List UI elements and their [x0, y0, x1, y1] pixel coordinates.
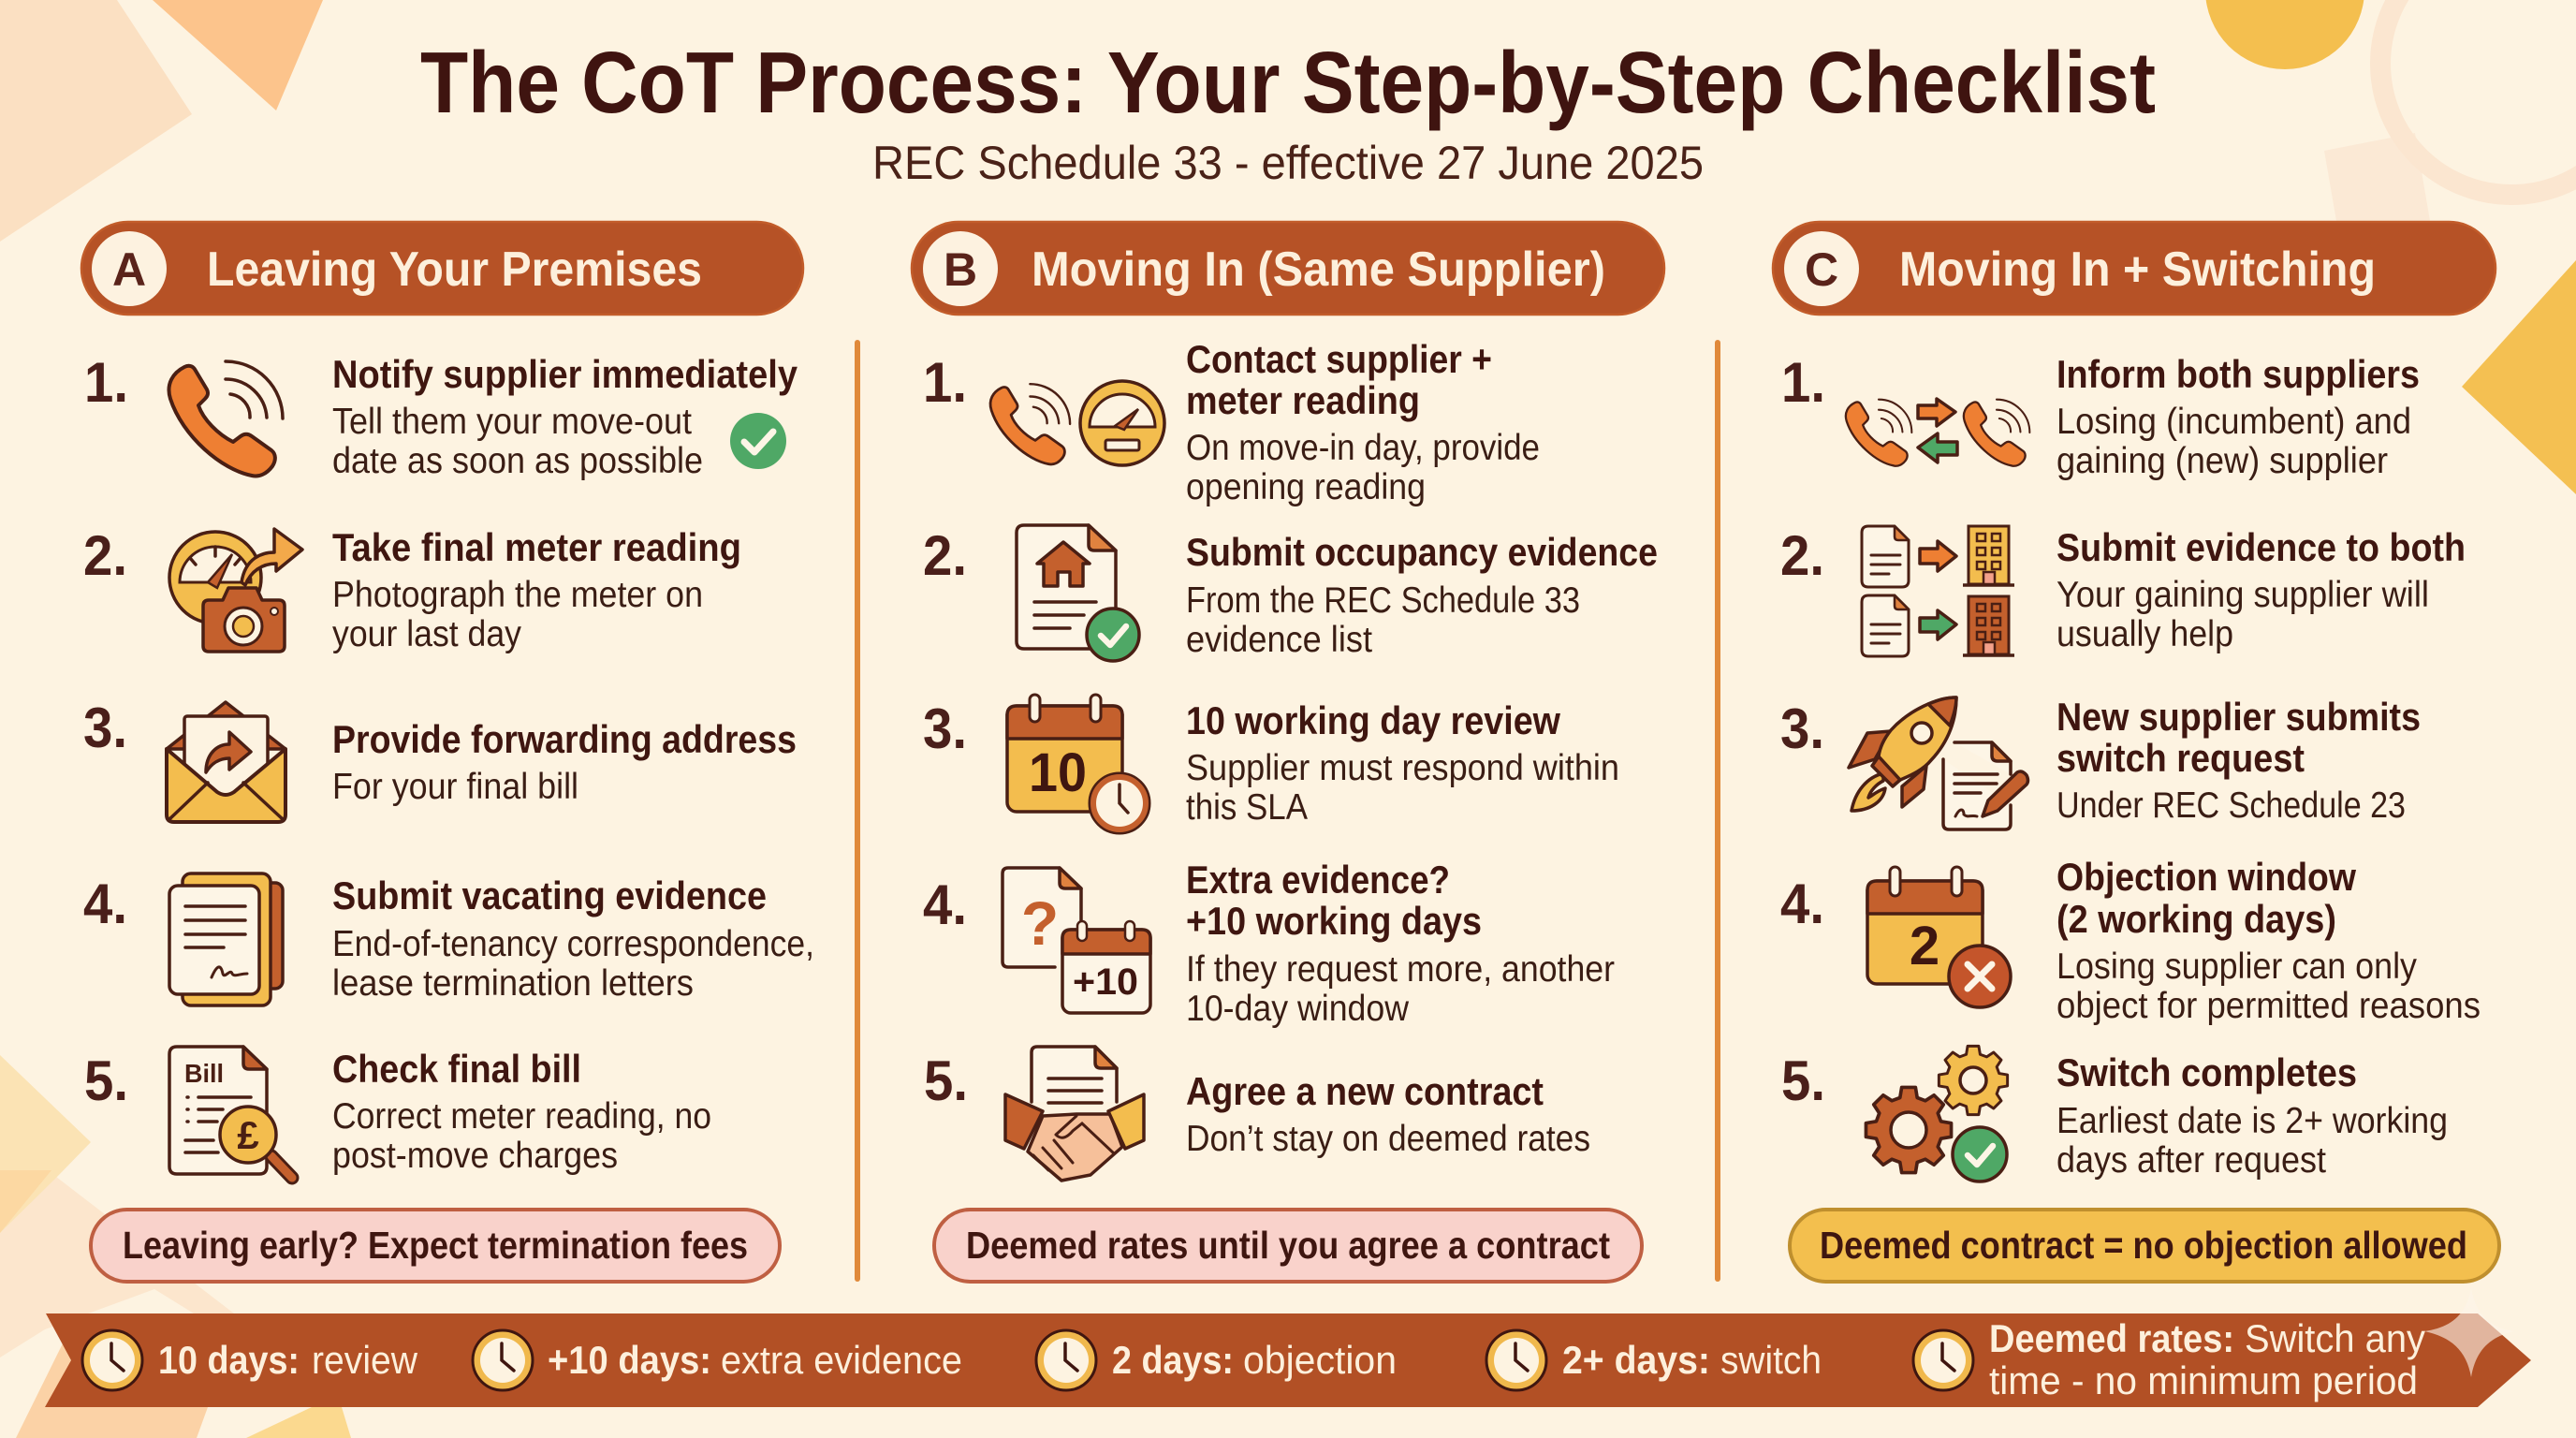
step A1 [84, 351, 798, 481]
icon: envelope [167, 702, 285, 822]
timing: 10 days: review [312, 1338, 418, 1382]
step B2 [923, 524, 1658, 661]
step B5: 5. [924, 1049, 968, 1112]
step A5: Correct meter reading, no [332, 1096, 711, 1137]
step C1 [1781, 351, 2420, 481]
panel: C Moving In + Switching [1773, 222, 2499, 1282]
header A [81, 222, 803, 315]
icon: two phones with arrows [1846, 399, 2029, 466]
step A1: Notify supplier immediately [332, 352, 798, 396]
icon: 2 day calendar with cross: 2 [1910, 916, 1939, 976]
step B1: meter reading [1186, 378, 1420, 422]
step C3: New supplier submits [2056, 695, 2421, 739]
column divider left [855, 340, 860, 1282]
step C2 [1780, 524, 2466, 656]
step C1: gaining (new) supplier [2056, 441, 2388, 481]
icon: documents [169, 873, 283, 1005]
step A3 [83, 697, 797, 822]
timing: deemed rates: time - no minimum period [1989, 1358, 2418, 1402]
header C: Moving In + Switching [1899, 242, 2376, 297]
step A2: Photograph the meter on [332, 575, 703, 615]
step B4: Extra evidence? [1186, 858, 1450, 902]
step C2: Submit evidence to both [2056, 525, 2466, 569]
step C2: Your gaining supplier will [2056, 575, 2429, 615]
timing: +10 days: extra evidence [721, 1338, 962, 1382]
step C3 [1780, 695, 2421, 829]
step A4: Submit vacating evidence [332, 873, 767, 917]
header B [912, 222, 1664, 315]
step C5: Earliest date is 2+ working [2056, 1101, 2448, 1141]
step C5: 5. [1781, 1049, 1825, 1112]
step A1: Tell them your move-out [332, 402, 692, 442]
callout A: Leaving early? Expect termination fees [123, 1224, 748, 1267]
timing: 2 days: objection [1243, 1338, 1397, 1382]
timing: +10 days [473, 1330, 962, 1390]
step A4: lease termination letters [332, 963, 694, 1004]
step C4: object for permitted reasons [2056, 986, 2481, 1026]
step B4: 4. [923, 873, 967, 936]
header A: Leaving Your Premises [207, 242, 702, 297]
header C [1773, 222, 2496, 315]
step C4: Objection window [2056, 855, 2356, 899]
step C3: 3. [1780, 697, 1824, 760]
step B5 [924, 1047, 1590, 1181]
icon: question document and +10 calendar: +10 [1073, 961, 1138, 1003]
step A2: your last day [332, 614, 521, 654]
step B2: Submit occupancy evidence [1186, 530, 1658, 574]
step A3: Provide forwarding address [332, 717, 797, 761]
step A5: Check final bill [332, 1047, 581, 1091]
step B5: Don’t stay on deemed rates [1186, 1119, 1590, 1159]
step C5 [1781, 1046, 2448, 1181]
step C4: Losing supplier can only [2056, 946, 2417, 987]
callout B: Deemed rates until you agree a contract [966, 1224, 1610, 1267]
icon: phone and meter [990, 381, 1164, 465]
title: The CoT Process: Your Step-by-Step Checklist [420, 34, 2156, 131]
icon: meter and camera [169, 529, 302, 652]
icon: 10 day calendar [1007, 695, 1149, 833]
icon: question document and +10 calendar [1003, 868, 1150, 1013]
timing: 2+ days: switch [1720, 1338, 1822, 1382]
step C1: Inform both suppliers [2056, 352, 2420, 396]
step C1: Losing (incumbent) and [2056, 402, 2411, 442]
callout B [934, 1210, 1642, 1282]
icon: 2 day calendar with cross [1867, 867, 2011, 1007]
header B: Moving In (Same Supplier) [1032, 242, 1605, 297]
header A: A [112, 243, 146, 296]
timing: deemed rates [1913, 1316, 2425, 1402]
column divider right [1715, 340, 1720, 1282]
step B2: evidence list [1186, 620, 1372, 660]
step A5 [84, 1047, 711, 1178]
icon: house document [1017, 525, 1139, 661]
timing: 10 days: 10 days: [158, 1338, 300, 1382]
step B2: From the REC Schedule 33 [1186, 580, 1580, 621]
callout A [91, 1210, 780, 1282]
timing: deemed rates: Switch any [2245, 1316, 2425, 1360]
step A1: 1. [84, 351, 128, 414]
step A5: 5. [84, 1049, 128, 1112]
timing: 2 days [1036, 1330, 1397, 1390]
panel: A Leaving Your Premises [81, 222, 814, 1282]
callout C [1790, 1210, 2499, 1282]
step A3: For your final bill [332, 767, 578, 807]
step A4: End-of-tenancy correspondence, [332, 924, 814, 964]
timing: deemed rates: Deemed rates: [1989, 1316, 2234, 1360]
step B4: +10 working days [1186, 899, 1482, 943]
icon: 10 day calendar: 10 [1029, 742, 1087, 803]
timing: 2 days: 2 days: [1112, 1338, 1234, 1382]
icon: green check [730, 413, 786, 469]
timing: +10 days: +10 days: [548, 1338, 711, 1382]
icon: question document and +10 calendar: ? [1021, 888, 1059, 958]
timeline ribbon [45, 1287, 2531, 1407]
header B: B [944, 243, 977, 296]
timing: 2+ days [1486, 1330, 1822, 1390]
header C: C [1805, 243, 1838, 296]
sparkle [2424, 1287, 2514, 1377]
step A4 [83, 873, 814, 1005]
icon: phone [168, 361, 283, 477]
step C4: (2 working days) [2056, 897, 2336, 941]
step B4: 10-day window [1186, 989, 1410, 1029]
step A3: 3. [83, 697, 127, 759]
panel: B Moving In (Same Supplier) [912, 222, 1664, 1282]
step B3: 3. [923, 697, 967, 760]
icon: gears with check [1866, 1046, 2008, 1181]
step B3: 10 working day review [1186, 698, 1560, 742]
icon: bill with magnifier: Bill [184, 1059, 224, 1088]
icon: rocket and signed document [1849, 697, 2027, 829]
step B5: Agree a new contract [1186, 1069, 1544, 1113]
step C3: switch request [2056, 736, 2305, 780]
icon: documents to buildings [1862, 526, 2014, 656]
step A2: Take final meter reading [332, 525, 741, 569]
step C2: 2. [1780, 524, 1824, 587]
step B1 [923, 337, 1540, 507]
step C4: 4. [1780, 873, 1824, 935]
step C2: usually help [2056, 614, 2233, 654]
callout C: Deemed contract = no objection allowed [1820, 1224, 2467, 1267]
icon: bill with magnifier [169, 1047, 292, 1178]
step C1: 1. [1781, 351, 1825, 414]
step A4: 4. [83, 873, 127, 935]
step B1: opening reading [1186, 467, 1426, 507]
step B2: 2. [923, 524, 967, 587]
step C5: days after request [2056, 1140, 2326, 1181]
step B1: On move-in day, provide [1186, 428, 1540, 468]
step A1: date as soon as possible [332, 441, 703, 481]
step B4 [923, 858, 1615, 1029]
step A2: 2. [83, 524, 127, 587]
step C5: Switch completes [2056, 1050, 2357, 1094]
timing: 2+ days: 2+ days: [1562, 1338, 1710, 1382]
step B1: 1. [923, 351, 967, 414]
step A2 [83, 524, 741, 654]
subtitle: REC Schedule 33 - effective 27 June 2025 [872, 137, 1704, 189]
step C4 [1780, 855, 2481, 1026]
step B4: If they request more, another [1186, 949, 1615, 990]
icon: contract handshake [1005, 1047, 1144, 1181]
step B1: Contact supplier + [1186, 337, 1492, 381]
step B3 [923, 695, 1619, 833]
timing: 10 days [82, 1330, 418, 1390]
step B3: this SLA [1186, 787, 1308, 828]
icon: bill with magnifier: £ [237, 1113, 259, 1157]
step B3: Supplier must respond within [1186, 748, 1619, 788]
step C3: Under REC Schedule 23 [2056, 785, 2406, 826]
step A5: post-move charges [332, 1136, 618, 1176]
